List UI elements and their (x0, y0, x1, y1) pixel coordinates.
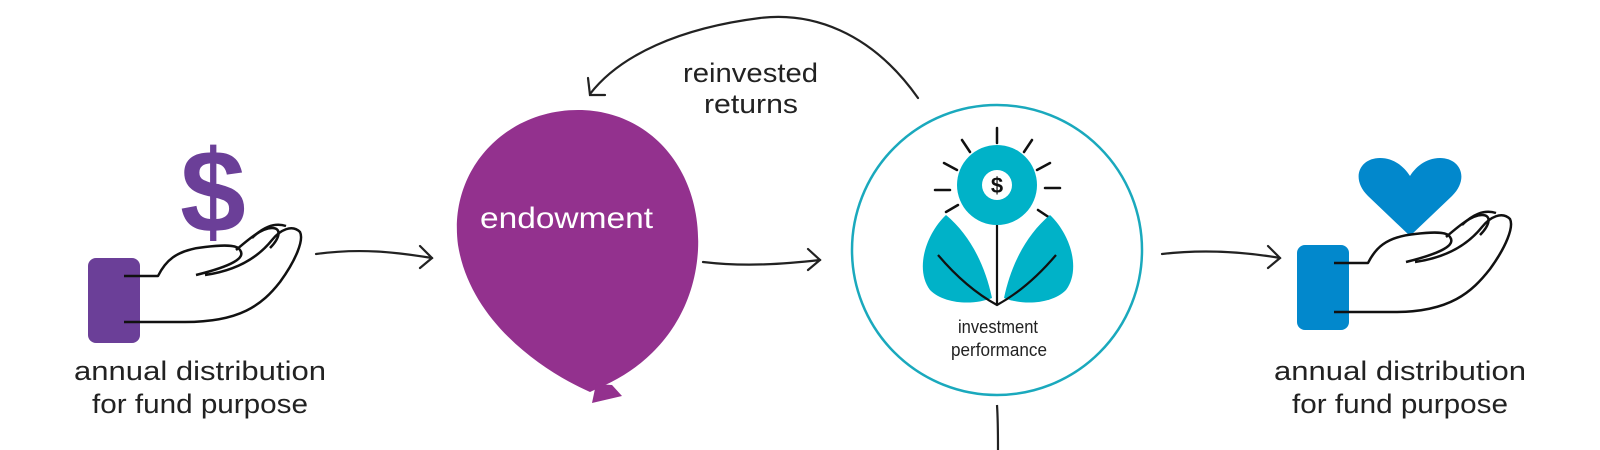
icon: hand with heart (right) (1297, 158, 1511, 330)
arrow: left hand to endowment (316, 246, 432, 268)
text: reinvested returns: returns (704, 89, 798, 119)
icon: hand with dollar (left) (88, 126, 301, 343)
icon: hand with dollar (left): $ (180, 126, 246, 258)
text: reinvested returns (683, 58, 818, 119)
balloon: endowment (457, 110, 698, 403)
text: reinvested returns: reinvested (683, 58, 818, 88)
icon: money plant (923, 128, 1073, 305)
text: right caption (1274, 356, 1526, 419)
text: investment performance (951, 317, 1047, 360)
text: right caption: annual distribution (1274, 356, 1526, 386)
icon: money plant: $ (991, 173, 1003, 198)
line: down from circle (997, 405, 998, 450)
balloon: endowment: endowment (480, 202, 654, 235)
text: left caption: for fund purpose (92, 389, 308, 419)
text: investment performance: investment (958, 317, 1038, 337)
panel: investment performance circle (852, 105, 1142, 395)
arrow: investment to right hand (1162, 246, 1280, 268)
text: left caption (74, 356, 326, 419)
text: left caption: annual distribution (74, 356, 326, 386)
arrow: endowment to investment (703, 249, 820, 270)
text: right caption: for fund purpose (1292, 389, 1508, 419)
text: investment performance: performance (951, 340, 1047, 360)
arrow: reinvested returns loop (588, 17, 918, 98)
